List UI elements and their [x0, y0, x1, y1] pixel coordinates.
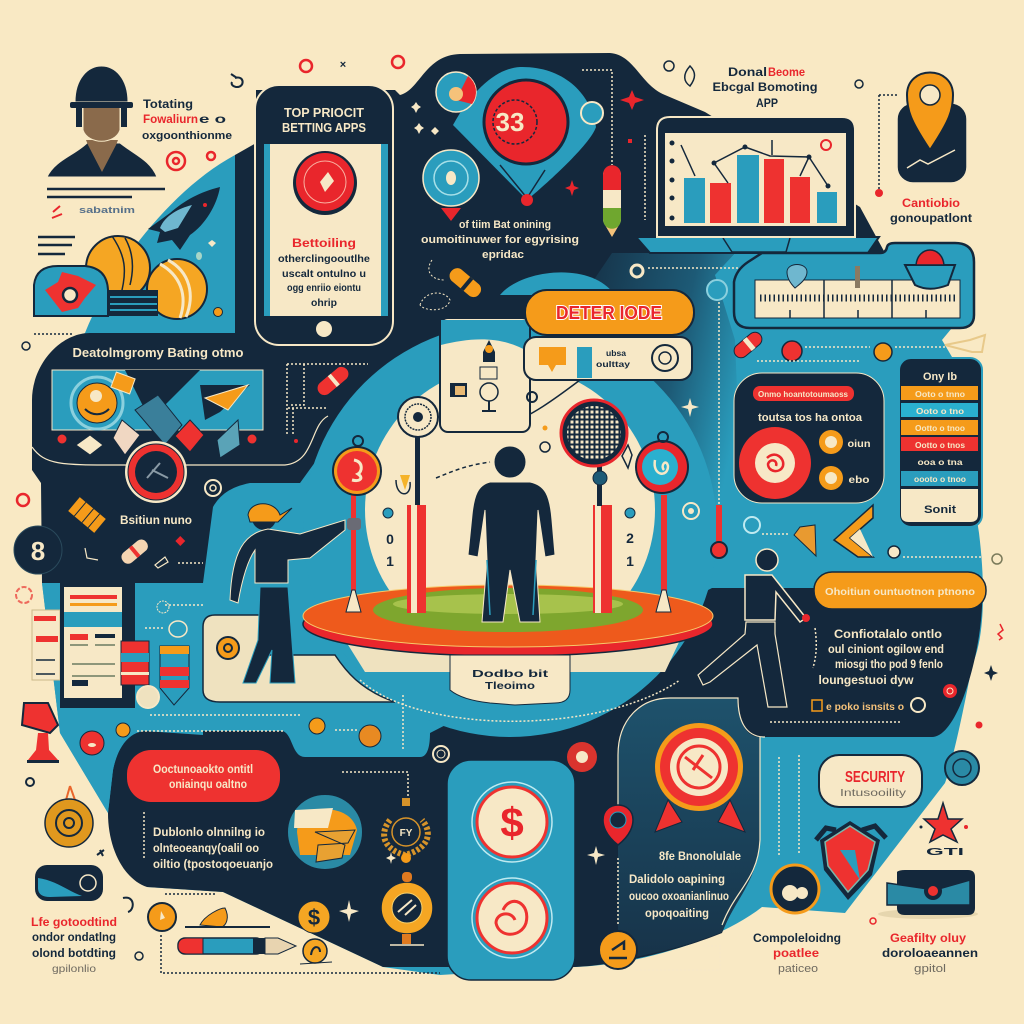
ring left bottom — [26, 778, 34, 786]
top left text: e o — [199, 112, 226, 126]
icon: eight ball: 8 — [31, 536, 45, 566]
icon: orange bars — [68, 497, 106, 533]
bottom right captions: Compoleloidng — [753, 931, 841, 945]
heading: left panel: Deatolmgromy Bating otmo — [72, 345, 244, 360]
icon: dollar coin — [298, 901, 330, 933]
icon: striped cylinders — [121, 641, 189, 708]
vertical red marker — [688, 505, 727, 558]
small caption — [52, 205, 135, 218]
icon: navy coins ring — [683, 503, 699, 519]
pin caption: Cantiobio — [902, 196, 960, 210]
panel: ruler — [734, 243, 974, 328]
panel: orange button: DETER IODE — [556, 303, 662, 323]
person: central figure — [468, 446, 555, 622]
nodes left — [17, 439, 298, 506]
top left text: Totating — [143, 97, 193, 111]
panel: phone: ogg enriio eiontu — [287, 283, 361, 294]
dotted box — [287, 364, 368, 435]
decorative right marks — [976, 554, 1003, 728]
heading: laptop title: Ebcgal Bomoting — [712, 82, 818, 94]
icon: trophy — [22, 703, 59, 763]
mid text block: opoqoaiting — [645, 906, 709, 920]
panel: menu list: Ooto o tno — [916, 407, 964, 416]
decorative ring — [527, 392, 537, 402]
icon: orange bulb — [148, 903, 440, 973]
panel: blue coin panel: $ — [500, 799, 524, 846]
icon: orange capsule — [447, 265, 484, 300]
mid text block: Dalidolo oapining — [629, 872, 725, 886]
panel: top pin with 33 — [453, 67, 603, 206]
pin caption: gonoupatlont — [890, 211, 972, 225]
central circle — [303, 323, 717, 737]
decorative rings top — [167, 56, 404, 170]
background: blue blob — [42, 105, 983, 975]
icon: laurel emblem — [384, 798, 428, 863]
bottom left captions: Lfe gotoodtind — [31, 915, 117, 929]
top left text: oxgoonthionme — [142, 130, 232, 142]
panel: orange button — [524, 290, 694, 380]
background: blue strip left — [42, 583, 203, 813]
left racket and pole — [398, 397, 438, 613]
panel: phone: ohrip — [311, 298, 337, 309]
mid text block: oucoo oxoanianlinuo — [629, 889, 729, 903]
bottom right captions: doroloaeannen — [882, 946, 978, 960]
icon: orange balls — [86, 236, 207, 319]
heading: laptop title — [712, 67, 818, 110]
panel: menu list: Ootto o tnoo — [915, 424, 965, 433]
left bottom text block: olnteoeanqy(oalil oo — [153, 841, 259, 855]
right text block: miosgi tho pod 9 fenlo — [835, 659, 943, 671]
panel: top pin with 33: 33 — [496, 107, 524, 137]
coin on card — [217, 637, 239, 659]
numbers left — [386, 531, 394, 569]
panel: phone — [255, 85, 393, 345]
decorative red stars — [565, 90, 644, 196]
icon: gold folder circle — [287, 794, 363, 870]
dashed squiggle — [420, 260, 450, 310]
cream curve left — [32, 416, 328, 465]
panel: blue coin panel — [447, 760, 575, 980]
top center text: oumoitinuwer for egyrising — [421, 234, 579, 246]
icon: balls on strip — [80, 718, 449, 762]
icon: shield — [816, 821, 886, 900]
panel: phone: uscalt ontulno u — [282, 269, 366, 280]
decorative stars — [339, 102, 699, 922]
decorative ring left — [22, 342, 30, 350]
icon: chevron — [744, 505, 982, 558]
icon: orange ring photo — [771, 865, 819, 913]
panel: menu list: Ony Ib — [923, 371, 957, 383]
panel: menu list: Ootto o tnos — [915, 441, 966, 450]
center decorations — [383, 426, 635, 518]
icon: small marks — [231, 59, 346, 87]
mid text block — [629, 849, 741, 920]
text lines — [38, 189, 165, 254]
right red racket and pole — [561, 400, 627, 613]
bottom left captions: gpilonlio — [52, 964, 97, 975]
right text block: Confiotalalo ontlo — [834, 629, 942, 641]
icon: dollar coin: $ — [308, 905, 320, 930]
right text block: oul ciniont ogilow end — [828, 644, 944, 656]
background: navy lower field — [108, 588, 982, 967]
panel: menu list: oooto o tnoo — [914, 475, 966, 484]
left bottom text block: oiltio (tpostoqoeuanjo — [153, 857, 273, 871]
icon: red round badge — [125, 441, 187, 503]
right text block — [770, 628, 957, 722]
left bottom text block — [144, 772, 408, 871]
small caption: sabatnim — [79, 205, 135, 215]
left sign pole — [332, 436, 382, 612]
mid text block: 8fe Bnonolulale — [659, 849, 741, 863]
top left person — [47, 66, 157, 177]
background: dark teal field — [560, 253, 745, 590]
panel: red offer: toutsa tos ha ontoa — [758, 412, 863, 424]
security chip: SECURITY — [845, 769, 905, 786]
icon: small marks: × — [340, 59, 346, 71]
panel: phone: TOP PRIOCIT — [284, 105, 364, 120]
central platform — [303, 585, 713, 672]
bottom right captions: gpitol — [914, 963, 946, 975]
icon: bandage and marks — [85, 536, 203, 568]
dotted verticals — [779, 755, 799, 855]
icon: red capsule — [315, 364, 351, 398]
background: navy upper field — [32, 53, 885, 583]
bottom left captions — [31, 915, 117, 975]
panel: red label: Ooctunoaokto ontitl — [153, 762, 253, 776]
numbers right — [626, 530, 634, 569]
icon: lower coin — [300, 939, 332, 964]
icon: card — [878, 870, 978, 919]
panel: menu list: Sonit — [924, 504, 956, 516]
bottom right captions: Geafilty oluy — [890, 931, 966, 945]
numbers left: 1 — [386, 553, 394, 569]
outline of mid panel — [618, 698, 765, 925]
icon: laurel emblem: FY — [400, 828, 413, 839]
person panel: cream card — [203, 615, 395, 702]
panel: red label: oniainqu oaltno — [169, 777, 247, 791]
panel: phone: otherclingooutlhe — [278, 254, 370, 265]
right text block: loungestuoi dyw — [818, 675, 914, 687]
icon: target badge with ribbons — [655, 723, 745, 832]
icon: blue target — [423, 150, 479, 221]
panel: red offer: Onmo hoantotoumaoss — [758, 390, 849, 399]
icon: small round badge — [436, 72, 476, 112]
panel: phone: BETTING APPS — [282, 120, 366, 135]
icon: pencil — [178, 938, 296, 954]
left bottom text block: Dublonlo olnnilng io — [153, 825, 265, 839]
numbers right: 1 — [626, 553, 634, 569]
heading: laptop title: Beome — [768, 67, 805, 79]
icon: eight ball — [14, 526, 62, 574]
panel: small icon board — [440, 318, 530, 432]
icon: red star with caption: GTI — [926, 847, 964, 858]
dotted lines upper — [582, 70, 645, 220]
icon: gold coin with target — [45, 786, 93, 847]
left panel diamonds — [57, 420, 257, 458]
icon: red star with caption — [920, 803, 968, 858]
panel: menu list: Ooto o tnno — [915, 390, 965, 399]
bottom icons: marks — [97, 850, 216, 960]
panel: orange button: ubsa — [606, 349, 627, 358]
icon: stripes — [108, 290, 158, 316]
platform label: Dodbo bit — [472, 669, 549, 680]
icon: hat on line — [185, 908, 270, 927]
icon: faint badge — [945, 335, 985, 352]
rings top right — [664, 61, 863, 88]
person: left figure pointing — [230, 504, 361, 683]
panel: document stack — [32, 583, 135, 708]
panel: orange button: oulttay — [596, 360, 631, 369]
blue dome behind button — [500, 272, 615, 295]
label: badge caption: Bsitiun nuno — [120, 513, 192, 527]
top center text: of tiim Bat onining — [459, 219, 551, 231]
top center text — [421, 219, 579, 261]
chart: laptop bar chart — [636, 117, 879, 253]
panel: red offer — [734, 373, 884, 503]
panel: red offer: ebo — [848, 475, 870, 486]
blue strip details — [137, 601, 403, 750]
icon: mid pin, coin, ball — [567, 742, 722, 970]
icon: mini card — [35, 865, 103, 901]
panel: phone: Bettoiling — [292, 236, 356, 250]
bottom right captions — [753, 918, 978, 975]
bottom right captions: poatlee — [773, 946, 819, 960]
panel: mid dark teal — [618, 698, 760, 960]
icon: red swirl — [16, 587, 32, 603]
pin caption — [890, 196, 972, 225]
panel: menu list — [899, 358, 982, 527]
heading: laptop title: APP — [756, 98, 778, 110]
icon: tablet with red shape — [34, 266, 222, 334]
bottom left captions: ondor ondatlng — [32, 930, 116, 944]
security chip: Intusooility — [840, 788, 906, 799]
person: right walking figure — [698, 549, 810, 707]
platform label: Tleoimo — [485, 681, 535, 692]
icon: location pin panel — [875, 72, 967, 197]
panel: red label — [127, 750, 280, 802]
icon: red capsule and balls — [731, 329, 950, 361]
icon: gold locket — [381, 872, 433, 945]
bottom right captions: paticeo — [778, 963, 818, 975]
panel: right orange button — [814, 572, 986, 609]
top left text — [142, 97, 232, 142]
security chip — [819, 755, 922, 807]
top left text: Fowaliurn — [143, 112, 198, 126]
platform label — [450, 655, 570, 705]
heading: laptop title: Donal — [728, 67, 767, 79]
numbers left: 0 — [386, 531, 394, 547]
connector nodes — [631, 265, 740, 505]
icon: rocket — [148, 187, 220, 260]
right blue sign and pole — [635, 432, 689, 612]
panel: left blue collage — [52, 370, 263, 445]
panel: right orange button: Ohoitiun ountuotnon ptnono — [825, 586, 975, 598]
bottom left captions: olond botdting — [32, 946, 116, 960]
panel: menu list: ooa o tna — [918, 458, 963, 467]
icon: capsule — [603, 165, 621, 237]
panel: red offer: oiun — [848, 439, 870, 450]
numbers right: 2 — [626, 530, 634, 546]
right text block: e poko isnsits o — [826, 702, 904, 713]
icon: globe — [945, 751, 979, 785]
top center text: epridac — [482, 249, 524, 261]
